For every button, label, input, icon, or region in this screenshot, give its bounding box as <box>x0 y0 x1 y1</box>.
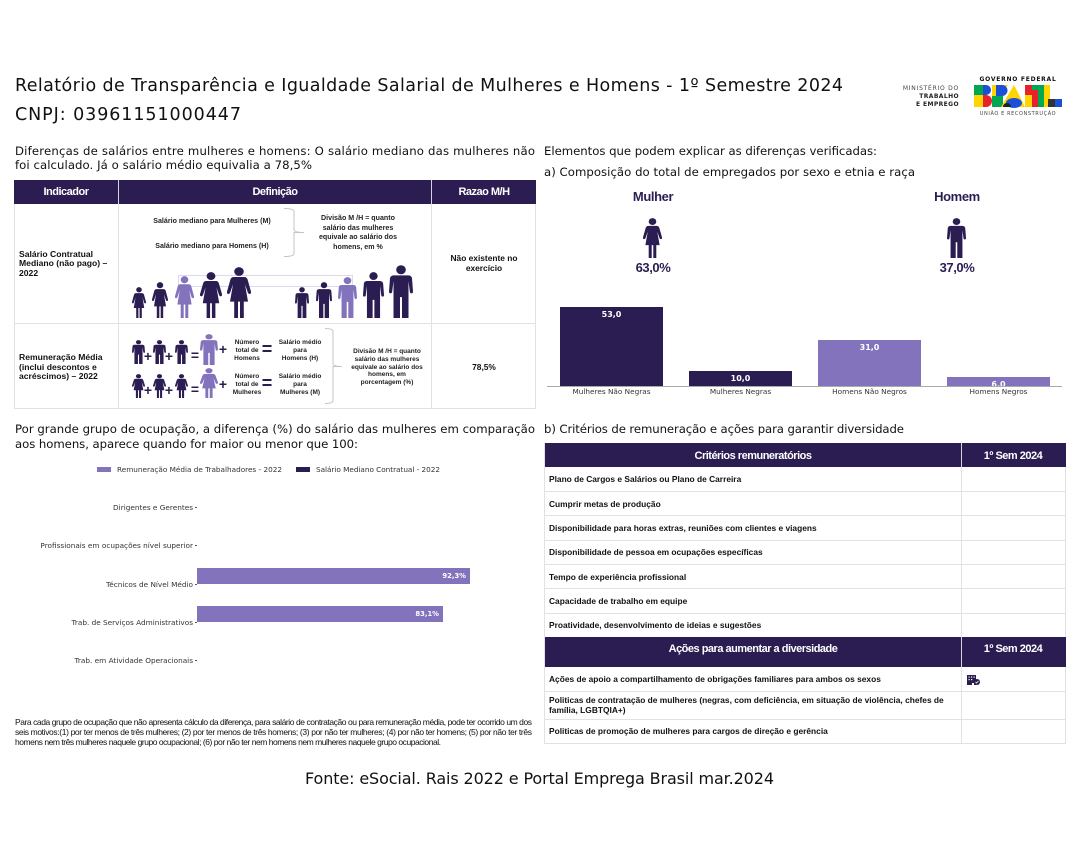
heading: diferenças de salários: Diferenças de salários entre mulheres e homens: O salário mediano das mulheres não <box>15 144 535 158</box>
bracket <box>284 208 304 256</box>
criteria rows <box>549 474 817 630</box>
category labels: Técnicos de Nível Médio <box>105 580 194 589</box>
footnote: homens nem três mulheres naquele grupo ocupacional; (6) por não ter nem homens nem mulheres naquele grupo ocupacional. <box>15 737 441 747</box>
criteria rows: Plano de Cargos e Salários ou Plano de Carreira <box>549 474 742 484</box>
logo: governo federal brasil: GOVERNO FEDERAL <box>979 76 1057 83</box>
icons: mean remuneration equations <box>132 334 218 398</box>
panel: indicator table <box>14 180 536 408</box>
action rows: família, LGBTQIA+) <box>549 705 626 715</box>
header: ações: 1º Sem 2024 <box>984 643 1044 655</box>
operators: = <box>191 381 199 397</box>
legend: Remuneração Média de Trabalhadores - 2022 <box>117 465 282 474</box>
operators: = <box>191 347 199 363</box>
definition row 2 text: Mulheres (M) <box>280 389 320 396</box>
title: CNPJ: 03961151000447 <box>15 105 241 125</box>
definition row 2 text: Número <box>235 373 259 380</box>
heading: elementos <box>544 144 915 179</box>
operators: + <box>219 341 227 357</box>
header: critérios remuneratórios <box>545 443 1066 467</box>
bar: homens negros <box>947 377 1050 396</box>
ratio values: exercício <box>466 263 502 273</box>
action rows: Politicas de promoção de mulheres para cargos de direção e gerência <box>549 726 828 736</box>
logo: ministério: MINISTÉRIO DO <box>903 84 959 92</box>
header: ações <box>545 637 1066 667</box>
connector box <box>178 276 352 286</box>
bar: mulheres negras: Mulheres Negras <box>710 387 771 396</box>
logo: ministério: TRABALHO <box>919 93 959 100</box>
heading: diferenças de salários <box>15 144 535 172</box>
sex composition: homem: 37,0% <box>940 260 975 275</box>
heading: critérios: b) Critérios de remuneração e ações para garantir diversidade <box>544 422 904 436</box>
definition row 2 text: para <box>293 347 307 354</box>
row labels: 2022 <box>19 268 38 278</box>
footnote: seis motivos:(1) por ter menos de três mulheres; (2) por ter menos de três homens; (3) por não ter mulheres; (4) por não ter homens; (5) por não ter três <box>15 727 532 737</box>
heading: diferenças de salários: foi calculado. Já o salário médio equivalia a 78,5% <box>15 158 312 172</box>
definition row 2 text: homens, em <box>368 371 406 378</box>
bar: homens negros: Homens Negros <box>970 387 1028 396</box>
bar: técnicos <box>197 568 470 584</box>
bar: mulheres negras: 10,0 <box>731 374 751 383</box>
sex composition: homem: Homem <box>934 189 980 204</box>
table header: Definição <box>252 186 298 198</box>
bar: serviços administrativos: 83,1% <box>415 610 439 618</box>
definition row 2 text: equivale ao salário dos <box>351 364 423 371</box>
bar: homens não negros: 31,0 <box>860 343 880 352</box>
table header: Razao M/H <box>458 186 510 198</box>
category labels <box>40 503 194 665</box>
criteria rows: Disponibilidade de pessoa em ocupações específicas <box>549 547 763 557</box>
bar: homens negros: 6,0 <box>991 380 1006 389</box>
chart: composition bars <box>547 307 1062 396</box>
title <box>15 76 843 125</box>
logo: ministério <box>903 84 959 108</box>
table header: Indicador <box>43 186 90 198</box>
sex composition: mulher: 63,0% <box>636 260 671 275</box>
definition row 2 text: Homens <box>234 355 260 362</box>
definition row 1 text: Salário mediano para Homens (H) <box>155 242 269 250</box>
header: ações: Ações para aumentar a diversidade <box>669 643 838 655</box>
source footer: Fonte: eSocial. Rais 2022 e Portal Emprega Brasil mar.2024 <box>305 769 774 788</box>
bar: homens não negros: Homens Não Negros <box>832 387 907 396</box>
heading: grupo de ocupação: Por grande grupo de ocupação, a diferença (%) do salário das mulheres em comparação <box>15 422 535 436</box>
operators: + <box>144 382 152 398</box>
row labels: acréscimos) – 2022 <box>19 371 98 381</box>
row labels: Mediano (não pago) – <box>19 258 108 268</box>
criteria rows: Tempo de experiência profissional <box>549 572 686 582</box>
category labels: Trab. em Atividade Operacionais <box>74 656 193 665</box>
icons: women and men by size <box>132 265 413 318</box>
bar: mulheres não negras <box>560 307 663 396</box>
category labels: Profissionais em ocupações nível superior <box>40 541 193 550</box>
chart: occupation bars <box>40 465 470 665</box>
definition row 2 text: Número <box>235 339 259 346</box>
definition row 1 text <box>153 214 397 251</box>
bar: mulheres não negras: Mulheres Não Negras <box>572 387 651 396</box>
header: critérios remuneratórios: 1º Sem 2024 <box>984 450 1044 462</box>
definition row 1 text: Salário mediano para Mulheres (M) <box>153 217 271 225</box>
operators: + <box>219 376 227 392</box>
logo: ministério: E EMPREGO <box>916 101 959 108</box>
heading: elementos: a) Composição do total de empregados por sexo e etnia e raça <box>544 165 915 179</box>
sex composition: mulher <box>633 189 673 275</box>
bar: mulheres negras <box>689 371 792 396</box>
legend <box>97 465 440 474</box>
definition row 2 text: porcentagem (%) <box>361 379 413 386</box>
definition row 2 text: Homens (H) <box>282 355 318 362</box>
action rows <box>549 674 944 736</box>
criteria rows: Cumprir metas de produção <box>549 499 661 509</box>
operators: + <box>144 348 152 364</box>
icon: building with check <box>967 675 980 685</box>
bar: homens não negros <box>818 340 921 396</box>
heading: elementos: Elementos que podem explicar as diferenças verificadas: <box>544 144 877 158</box>
definition row 2 text: Salário médio <box>279 339 321 346</box>
definition row 1 text: equivale ao salário dos <box>319 233 397 241</box>
table header <box>14 180 536 204</box>
legend: Salário Mediano Contratual - 2022 <box>316 465 440 474</box>
definition row 2 text: para <box>293 381 307 388</box>
sex composition: mulher: Mulher <box>633 189 673 204</box>
footnote: Para cada grupo de ocupação que não apresenta cálculo da diferença, para salário de contratação ou para remuneração média, pode ter ocorrido um dos <box>15 717 532 727</box>
category labels: Trab. de Serviços Administrativos <box>70 618 193 627</box>
row labels <box>19 249 108 381</box>
definition row 1 text: salário das mulheres <box>323 224 393 232</box>
row labels: Salário Contratual <box>19 249 93 259</box>
header: critérios remuneratórios: Critérios remuneratórios <box>695 450 812 462</box>
sex composition: homem <box>934 189 980 275</box>
heading: grupo de ocupação: aos homens, aparece quando for maior ou menor que 100: <box>15 437 358 451</box>
criteria rows: Proatividade, desenvolvimento de ideias e sugestões <box>549 620 762 630</box>
ratio values: Não existente no <box>450 253 518 263</box>
heading: grupo de ocupação <box>15 422 535 451</box>
row labels: (inclui descontos e <box>19 362 97 372</box>
row labels: Remuneração Média <box>19 352 103 362</box>
criteria rows: Disponibilidade para horas extras, reuniões com clientes e viagens <box>549 523 817 533</box>
definition row 2 text: total de <box>235 347 259 354</box>
panel: criteria table <box>544 443 1066 744</box>
criteria rows: Capacidade de trabalho em equipe <box>549 596 688 606</box>
footnote <box>15 717 532 747</box>
logo: governo federal brasil: UNIÃO E RECONSTRUÇÃO <box>980 110 1056 117</box>
definition row 1 text: Divisão M /H = quanto <box>321 214 396 222</box>
definition row 2 text <box>233 339 423 396</box>
bar: mulheres não negras: 53,0 <box>602 310 622 319</box>
action rows: Politicas de contratação de mulheres (negras, com deficiência, em situação de violência, chefes de <box>549 695 944 705</box>
ratio values: 78,5% <box>472 362 496 372</box>
action rows: Ações de apoio a compartilhamento de obrigações familiares para ambos os sexos <box>549 674 881 684</box>
operators <box>144 339 272 398</box>
bar: técnicos: 92,3% <box>442 572 466 580</box>
operators: + <box>165 382 173 398</box>
operators: + <box>165 348 173 364</box>
operators: = <box>262 373 272 393</box>
definition row 2 text: Mulheres <box>233 389 262 396</box>
category labels: Dirigentes e Gerentes <box>113 503 193 512</box>
logo: governo federal brasil <box>974 76 1062 117</box>
definition row 2 text: Divisão M /H = quanto <box>353 348 421 355</box>
bar: serviços administrativos <box>197 606 443 622</box>
definition row 2 text: salário das mulheres <box>355 356 420 363</box>
definition row 2 text: total de <box>235 381 259 388</box>
operators: = <box>262 339 272 359</box>
ratio values <box>450 253 518 372</box>
definition row 2 text: Salário médio <box>279 373 321 380</box>
title: Relatório de Transparência e Igualdade Salarial de Mulheres e Homens - 1º Semestre 2024 <box>15 76 843 96</box>
bracket <box>325 328 342 404</box>
definition row 1 text: homens, em % <box>333 243 384 251</box>
